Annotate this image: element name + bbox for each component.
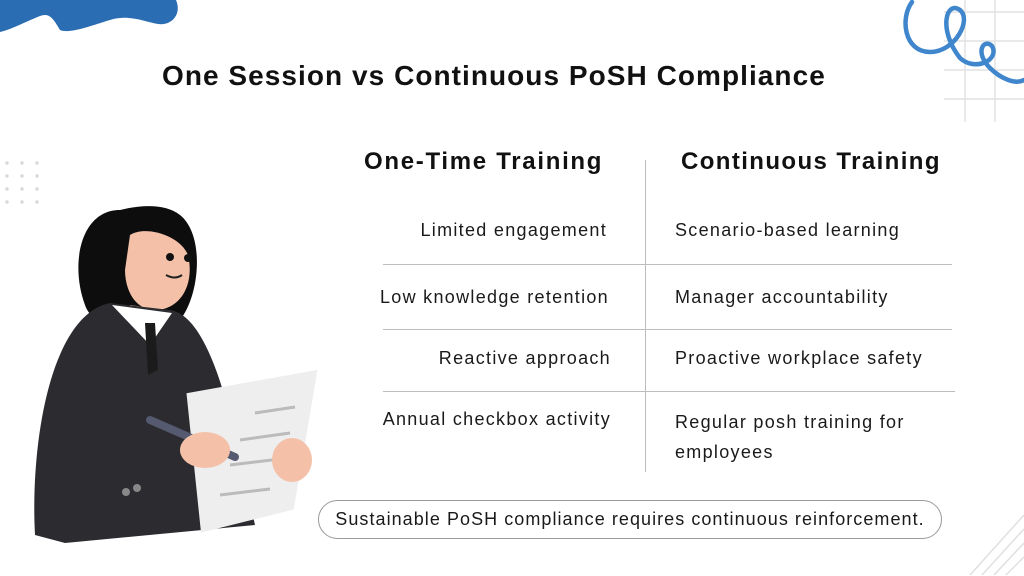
table: one-time items: Limited engagement xyxy=(420,220,607,240)
column heading: Continuous Training: Continuous Training xyxy=(681,148,941,175)
decoration: lines bottom-right xyxy=(970,514,1024,576)
decoration: blue blob top-left xyxy=(0,0,178,32)
table: continuous items xyxy=(675,220,923,462)
decoration: dots xyxy=(5,161,39,204)
table: one-time items xyxy=(380,220,611,429)
table: one-time items: Annual checkbox activity xyxy=(383,409,611,429)
title: One Session vs Continuous PoSH Compliance xyxy=(162,60,826,91)
illustration: woman holding document xyxy=(34,206,318,543)
table: one-time items: Reactive approach xyxy=(439,348,611,368)
column heading: One-Time Training: One-Time Training xyxy=(364,148,603,175)
table: continuous items: employees xyxy=(675,442,774,462)
callout: conclusion pill xyxy=(318,500,942,539)
table: continuous items: Proactive workplace safety xyxy=(675,348,923,368)
callout: conclusion pill: Sustainable PoSH compliance requires continuous reinforcement. xyxy=(335,509,925,529)
table: continuous items: Manager accountability xyxy=(675,287,889,307)
table: continuous items: Regular posh training for xyxy=(675,412,905,432)
table: one-time items: Low knowledge retention xyxy=(380,287,609,307)
table: continuous items: Scenario-based learning xyxy=(675,220,900,240)
decoration: grid and swirl top-right xyxy=(903,0,1024,122)
